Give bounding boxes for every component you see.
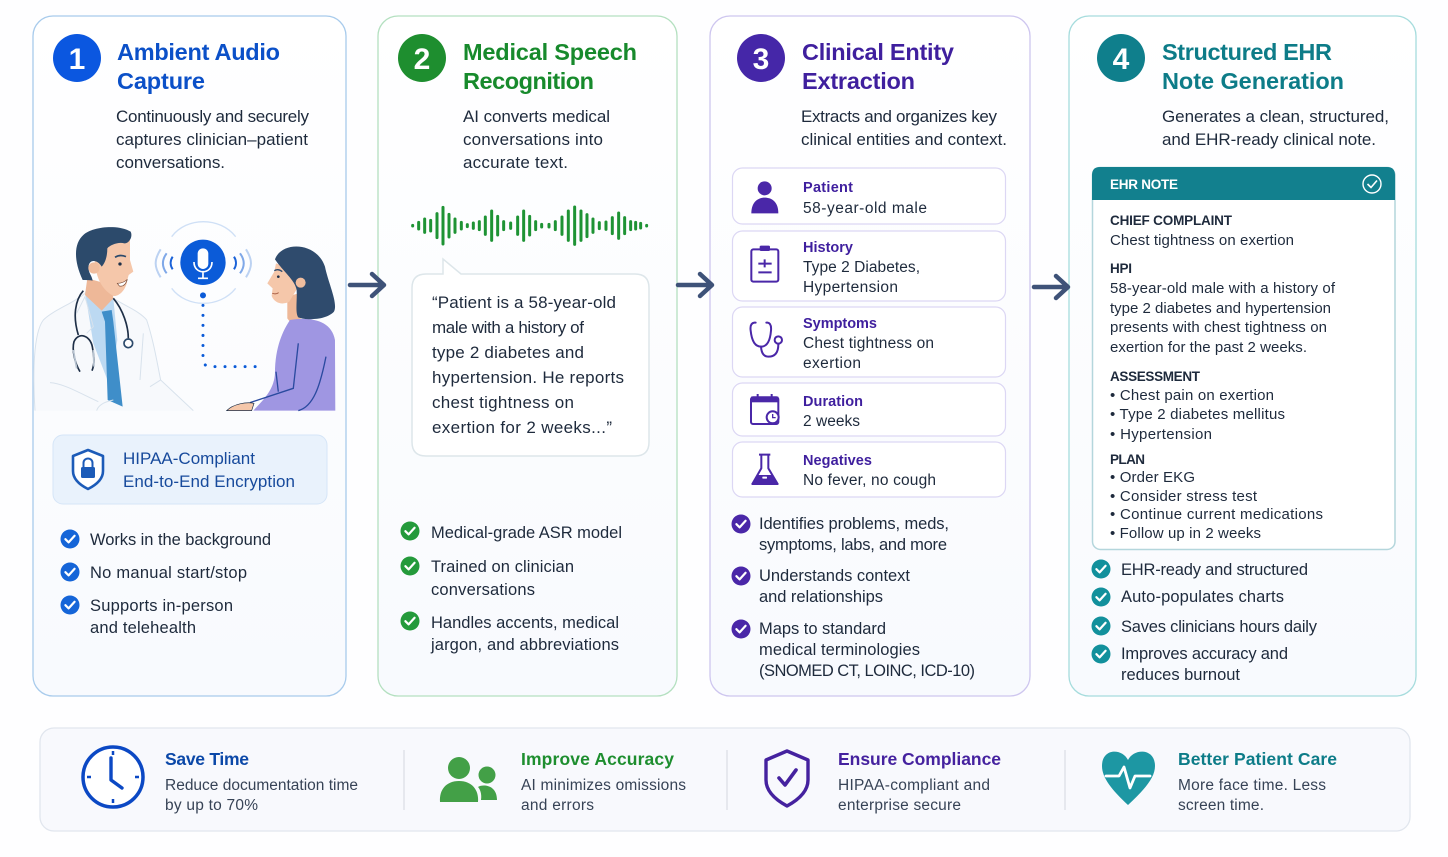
icon: shield with check <box>766 751 808 806</box>
heading: ambient audio capture: Capture <box>117 68 205 94</box>
HPI section: HPI <box>1110 261 1132 276</box>
outcomes list <box>1092 560 1318 684</box>
step 2 badge <box>398 34 446 82</box>
features list: Handles accents, medical <box>431 614 619 632</box>
speech bubble quote: male with a history of <box>432 318 584 337</box>
assessment section: • Hypertension <box>1110 426 1212 443</box>
heading: ambient audio capture: Ambient Audio <box>117 39 280 65</box>
benefits list: and telehealth <box>90 619 196 637</box>
EHR note header: EHR NOTE <box>1110 177 1178 192</box>
benefit: improve accuracy: and errors <box>521 797 594 814</box>
step 1 badge <box>53 34 101 82</box>
heading: structured EHR note generation <box>1162 39 1344 94</box>
description: captures clinician–patient <box>116 130 308 149</box>
description: AI converts medical <box>463 107 610 126</box>
benefit: ensure compliance: enterprise secure <box>838 797 961 814</box>
HIPAA callout: HIPAA-Compliant <box>123 449 255 468</box>
features list <box>400 522 622 654</box>
EHR note card <box>1092 167 1395 550</box>
panel: ambient audio capture <box>33 16 346 696</box>
description <box>463 107 610 172</box>
outcomes list: Saves clinicians hours daily <box>1121 618 1318 636</box>
heading: medical speech recognition: Recognition <box>463 68 594 94</box>
benefit: better patient care: screen time. <box>1178 797 1264 814</box>
benefit: save time: by up to 70% <box>165 797 258 814</box>
description: accurate text. <box>463 153 568 172</box>
speech bubble quote: type 2 diabetes and <box>432 343 584 362</box>
card: history <box>732 231 1006 301</box>
speech bubble quote: “Patient is a 58-year-old <box>432 293 616 312</box>
capabilities list: Understands context <box>759 567 910 585</box>
card: duration: 2 weeks <box>803 413 860 430</box>
benefit: save time <box>83 747 358 814</box>
icon: shield with lock <box>73 450 103 489</box>
icon: heart with pulse <box>1102 752 1155 805</box>
panel: structured EHR note generation <box>1069 16 1416 696</box>
benefits list: Works in the background <box>90 531 271 549</box>
EHR note header <box>1092 167 1395 200</box>
description: Continuously and securely <box>116 107 310 126</box>
chief complaint section: Chest tightness on exertion <box>1110 232 1294 249</box>
card: negatives: Negatives <box>803 453 872 469</box>
capabilities list <box>732 514 975 680</box>
heading: structured EHR note generation: Note Generation <box>1162 68 1344 94</box>
plan section <box>1110 452 1323 542</box>
outcomes list: reduces burnout <box>1121 666 1240 684</box>
panel: medical speech recognition <box>378 16 677 696</box>
HPI section: presents with chest tightness on <box>1110 319 1327 336</box>
panel: clinical entity extraction <box>710 16 1030 696</box>
card: symptoms: exertion <box>803 355 861 372</box>
plan section: • Order EKG <box>1110 469 1195 486</box>
card: patient: Patient <box>803 180 853 196</box>
description <box>1162 107 1389 149</box>
icon: people <box>440 757 497 802</box>
arrow 3 <box>1034 276 1068 298</box>
description: conversations into <box>463 130 603 149</box>
capabilities list: and relationships <box>759 588 883 606</box>
patient <box>227 246 335 411</box>
description: conversations. <box>116 153 225 172</box>
arrow 1 <box>350 274 384 296</box>
HPI section <box>1110 261 1336 356</box>
HPI section: exertion for the past 2 weeks. <box>1110 339 1307 356</box>
heading: structured EHR note generation: Structured EHR <box>1162 39 1332 65</box>
card: history: History <box>803 240 853 256</box>
assessment section <box>1110 369 1285 443</box>
card: duration: Duration <box>803 394 863 410</box>
plan section: • Consider stress test <box>1110 488 1258 505</box>
card: negatives <box>732 442 1006 497</box>
benefit: ensure compliance: Ensure Compliance <box>838 749 1001 769</box>
step 1 badge: 1 <box>69 43 85 76</box>
assessment section: ASSESSMENT <box>1110 369 1201 384</box>
card: symptoms <box>732 307 1006 377</box>
benefits list <box>60 530 271 637</box>
chart: audio waveform <box>413 207 647 244</box>
card: patient: 58-year-old male <box>803 200 927 217</box>
HIPAA callout: End-to-End Encryption <box>123 472 295 491</box>
heading: ambient audio capture <box>117 39 280 94</box>
features list: Trained on clinician <box>431 558 574 576</box>
HIPAA callout <box>53 435 327 504</box>
step 4 badge <box>1097 34 1145 82</box>
HPI section: 58-year-old male with a history of <box>1110 280 1336 297</box>
benefit: better patient care: More face time. Less <box>1178 777 1326 794</box>
plan section: • Follow up in 2 weeks <box>1110 525 1261 542</box>
step 2 badge: 2 <box>414 43 430 76</box>
outcomes list: EHR-ready and structured <box>1121 561 1308 579</box>
card: symptoms: Symptoms <box>803 316 877 332</box>
heading: medical speech recognition: Medical Speech <box>463 39 637 65</box>
speech bubble quote: exertion for 2 weeks...” <box>432 418 612 437</box>
doctor <box>34 227 193 411</box>
benefit: better patient care <box>1102 749 1337 814</box>
capabilities list: Identifies problems, meds, <box>759 515 949 533</box>
benefits list: Supports in-person <box>90 597 233 615</box>
assessment section: • Type 2 diabetes mellitus <box>1110 406 1285 423</box>
icon: clock <box>83 747 143 807</box>
card: negatives: No fever, no cough <box>803 472 936 489</box>
speech bubble quote <box>412 259 649 456</box>
capabilities list: Maps to standard <box>759 620 886 638</box>
step 3 badge: 3 <box>753 43 769 76</box>
outcomes list: Auto-populates charts <box>1121 588 1284 606</box>
features list: jargon, and abbreviations <box>430 636 619 654</box>
capabilities list: medical terminologies <box>759 641 920 659</box>
card: history: Hypertension <box>803 279 898 296</box>
benefit: ensure compliance: HIPAA-compliant and <box>838 777 990 794</box>
chief complaint section: CHIEF COMPLAINT <box>1110 213 1233 228</box>
icon: clipboard <box>751 246 778 282</box>
heading: clinical entity extraction <box>802 39 954 94</box>
benefit: save time: Reduce documentation time <box>165 777 358 794</box>
chief complaint section <box>1110 213 1294 249</box>
arrow 2 <box>678 274 712 296</box>
description: Extracts and organizes key <box>801 107 998 126</box>
features list: conversations <box>431 581 535 599</box>
plan section: • Continue current medications <box>1110 506 1323 523</box>
description: and EHR-ready clinical note. <box>1162 130 1376 149</box>
illustration: doctor, microphone and patient <box>34 222 335 411</box>
step 4 badge: 4 <box>1113 43 1130 76</box>
description <box>116 107 310 172</box>
outcomes list: Improves accuracy and <box>1121 645 1288 663</box>
card: symptoms: Chest tightness on <box>803 335 934 352</box>
icon: patient <box>751 181 778 213</box>
benefits bar <box>40 728 1410 831</box>
benefit: improve accuracy: AI minimizes omissions <box>521 777 686 794</box>
speech bubble quote: chest tightness on <box>432 393 574 412</box>
card: patient <box>732 168 1006 224</box>
step 3 badge <box>737 34 785 82</box>
capabilities list: symptoms, labs, and more <box>759 536 947 554</box>
benefits list: No manual start/stop <box>90 564 247 582</box>
benefit: ensure compliance <box>766 749 1001 814</box>
heading: clinical entity extraction: Extraction <box>802 68 915 94</box>
icon: stethoscope <box>750 323 782 357</box>
card: duration <box>732 383 1006 436</box>
capabilities list: (SNOMED CT, LOINC, ICD-10) <box>759 662 975 680</box>
description <box>801 107 1007 149</box>
assessment section: • Chest pain on exertion <box>1110 387 1274 404</box>
card: history: Type 2 Diabetes, <box>803 259 920 276</box>
benefit: improve accuracy: Improve Accuracy <box>521 749 674 769</box>
benefit: save time: Save Time <box>165 749 249 769</box>
features list: Medical-grade ASR model <box>431 524 622 542</box>
HPI section: type 2 diabetes and hypertension <box>1110 300 1331 317</box>
heading: clinical entity extraction: Clinical Entity <box>802 39 954 65</box>
heading: medical speech recognition <box>463 39 637 94</box>
icon: flask <box>752 455 778 484</box>
microphone with sound waves <box>156 222 260 367</box>
description: clinical entities and context. <box>801 130 1007 149</box>
plan section: PLAN <box>1110 452 1145 467</box>
benefit: improve accuracy <box>440 749 686 814</box>
benefit: better patient care: Better Patient Care <box>1178 749 1337 769</box>
icon: calendar with clock <box>751 394 779 424</box>
description: Generates a clean, structured, <box>1162 107 1389 126</box>
speech bubble quote: hypertension. He reports <box>432 368 624 387</box>
